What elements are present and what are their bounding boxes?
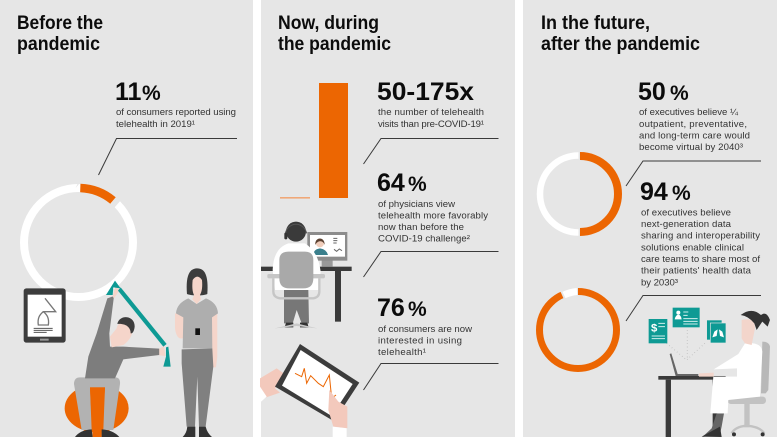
stat: 11 percent: % bbox=[142, 82, 161, 105]
illustration: man stretching on exercise ball bbox=[65, 281, 171, 437]
stat: 64 percent: telehealth more favorably bbox=[378, 210, 488, 222]
illustration: woman at laptop with chair bbox=[658, 311, 770, 437]
stat: 11 percent: of consumers reported using bbox=[116, 107, 236, 118]
stat: 11 percent: 11 bbox=[115, 78, 141, 106]
stat: 76 percent: telehealth¹ bbox=[378, 347, 426, 358]
heading: before the pandemic: pandemic bbox=[17, 34, 100, 55]
stat: 76 percent: % bbox=[408, 298, 427, 321]
panel: in the future, after the pandemic bbox=[523, 0, 777, 437]
stat: 50 percent: 50 bbox=[638, 78, 666, 106]
stat: 76 percent: 76 bbox=[377, 294, 405, 322]
stat: 94 percent: % bbox=[672, 182, 691, 205]
leader line bbox=[98, 138, 237, 175]
stat: 76 percent: interested in using bbox=[378, 336, 462, 346]
stat: 94 percent: sharing and interoperability bbox=[641, 230, 760, 242]
stat: 94 percent: solutions enable clinical bbox=[641, 242, 744, 254]
heading: in the future, after the pandemic: In the future, bbox=[541, 13, 650, 34]
stat: 11 percent bbox=[115, 78, 236, 130]
leader line bbox=[364, 364, 498, 390]
stat: 50 percent bbox=[638, 78, 750, 153]
leader line bbox=[364, 252, 498, 277]
leader line bbox=[364, 138, 498, 164]
heading: now, during the pandemic: Now, during bbox=[278, 13, 379, 34]
bar chart: telehealth visits bbox=[280, 83, 348, 199]
stat: 94 percent: their patients' health data bbox=[641, 266, 752, 276]
stat: 94 percent: care teams to share most of bbox=[641, 254, 760, 265]
stat: 64 percent: 64 bbox=[377, 169, 405, 197]
donut chart: 94 percent bbox=[540, 292, 616, 368]
heading: now, during the pandemic: the pandemic bbox=[278, 34, 391, 55]
leader line bbox=[626, 161, 761, 186]
stat: 11 percent: telehealth in 2019¹ bbox=[116, 119, 195, 130]
stat: 50-175x: 50-175x bbox=[377, 78, 474, 106]
illustration: data cards bbox=[649, 308, 726, 360]
stat: 50 percent: of executives believe ¼ bbox=[639, 107, 739, 118]
stat: 76 percent: of consumers are now bbox=[378, 324, 472, 335]
stat: 50 percent: % bbox=[670, 82, 689, 105]
stat: 64 percent bbox=[377, 169, 488, 244]
panel: now, during the pandemic bbox=[260, 0, 515, 437]
stat: 64 percent: of physicians view bbox=[378, 199, 455, 210]
illustration: standing woman bbox=[175, 268, 218, 437]
panel: before the pandemic bbox=[0, 0, 253, 437]
illustration: tablet with exercise bbox=[24, 288, 66, 343]
stat: 94 percent bbox=[640, 178, 760, 288]
stat: 50 percent: and long-term care would bbox=[639, 130, 750, 142]
stat: 94 percent: of executives believe bbox=[641, 208, 731, 218]
illustration: clinician at desk with video call bbox=[261, 222, 352, 328]
leader line bbox=[626, 296, 761, 321]
stat: 50 percent: outpatient, preventative, bbox=[639, 119, 747, 130]
donut chart: 11 percent bbox=[24, 184, 133, 297]
stat: 76 percent bbox=[377, 294, 472, 358]
stat: 64 percent: COVID-19 challenge² bbox=[378, 234, 471, 244]
stat: 94 percent: by 2030³ bbox=[641, 278, 678, 288]
heading: in the future, after the pandemic: after the pandemic bbox=[541, 34, 700, 55]
stat: 50-175x: visits than pre-COVID-19¹ bbox=[378, 119, 484, 130]
stat: 50 percent: become virtual by 2040³ bbox=[639, 142, 743, 153]
heading: before the pandemic bbox=[17, 13, 103, 55]
illustration: hands holding tablet with ECG bbox=[260, 344, 359, 437]
stat: 64 percent: % bbox=[408, 173, 427, 196]
stat: 50-175x bbox=[377, 78, 484, 130]
heading: in the future, after the pandemic bbox=[541, 13, 700, 55]
stat: 64 percent: now than before the bbox=[378, 222, 464, 233]
donut chart: 50 percent bbox=[540, 156, 618, 232]
heading: now, during the pandemic bbox=[278, 13, 391, 55]
stat: 94 percent: next-generation data bbox=[641, 219, 732, 230]
stat: 94 percent: 94 bbox=[640, 178, 668, 206]
illustration: data cards: $ bbox=[651, 323, 658, 335]
stat: 50-175x: the number of telehealth bbox=[378, 107, 484, 118]
heading: before the pandemic: Before the bbox=[17, 13, 103, 34]
